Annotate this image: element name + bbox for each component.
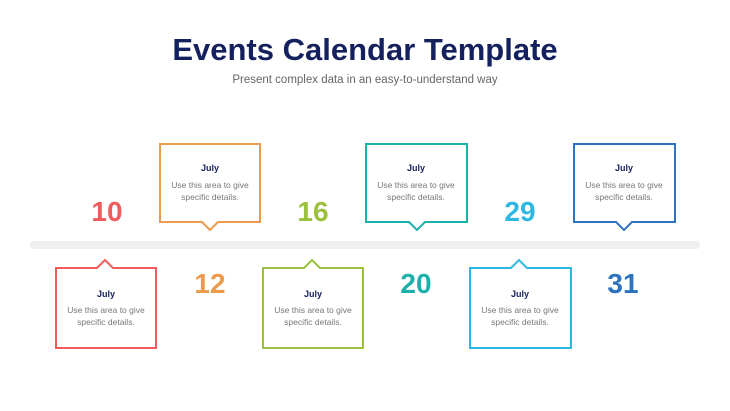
box: teal: Use this area to give	[377, 180, 455, 190]
box: red	[56, 260, 156, 348]
box: green: Use this area to give	[274, 305, 352, 315]
box: blue: Use this area to give	[585, 180, 663, 190]
box: green: specific details.	[284, 317, 342, 327]
box: teal: specific details.	[387, 192, 445, 202]
date: 31: 31	[607, 268, 639, 299]
box: teal: July	[407, 163, 425, 173]
event 3: July 16	[263, 196, 363, 348]
timeline bar	[30, 241, 700, 249]
title: Events Calendar Template	[172, 32, 558, 67]
box: red: Use this area to give	[67, 305, 145, 315]
box: green: July	[304, 289, 322, 299]
box: orange	[160, 144, 260, 230]
date: 10: 10	[91, 196, 123, 227]
box: light blue: July	[511, 289, 529, 299]
box: blue: specific details.	[595, 192, 653, 202]
event 1: July 10	[56, 196, 156, 348]
event 6: July 31	[574, 144, 675, 299]
subtitle: Present complex data in an easy-to-understand way	[232, 74, 498, 86]
date: 12: 12	[194, 268, 226, 299]
box: light blue: specific details.	[491, 317, 549, 327]
box: orange: specific details.	[181, 192, 239, 202]
box: light blue: Use this area to give	[481, 305, 559, 315]
box: blue: July	[615, 163, 633, 173]
box: orange: July	[201, 163, 219, 173]
date: 20: 20	[400, 268, 432, 299]
box: red: specific details.	[77, 317, 135, 327]
event 4: July 20	[366, 144, 467, 299]
box: orange: Use this area to give	[171, 180, 249, 190]
box: teal	[366, 144, 467, 230]
box: light blue	[470, 260, 571, 348]
date: 29: 29	[504, 196, 536, 227]
box: blue	[574, 144, 675, 230]
event 5: July 29	[470, 196, 571, 348]
box: green	[263, 260, 363, 348]
box: red: July	[97, 289, 115, 299]
event 2: July 12	[160, 144, 260, 299]
date: 16: 16	[297, 196, 329, 227]
